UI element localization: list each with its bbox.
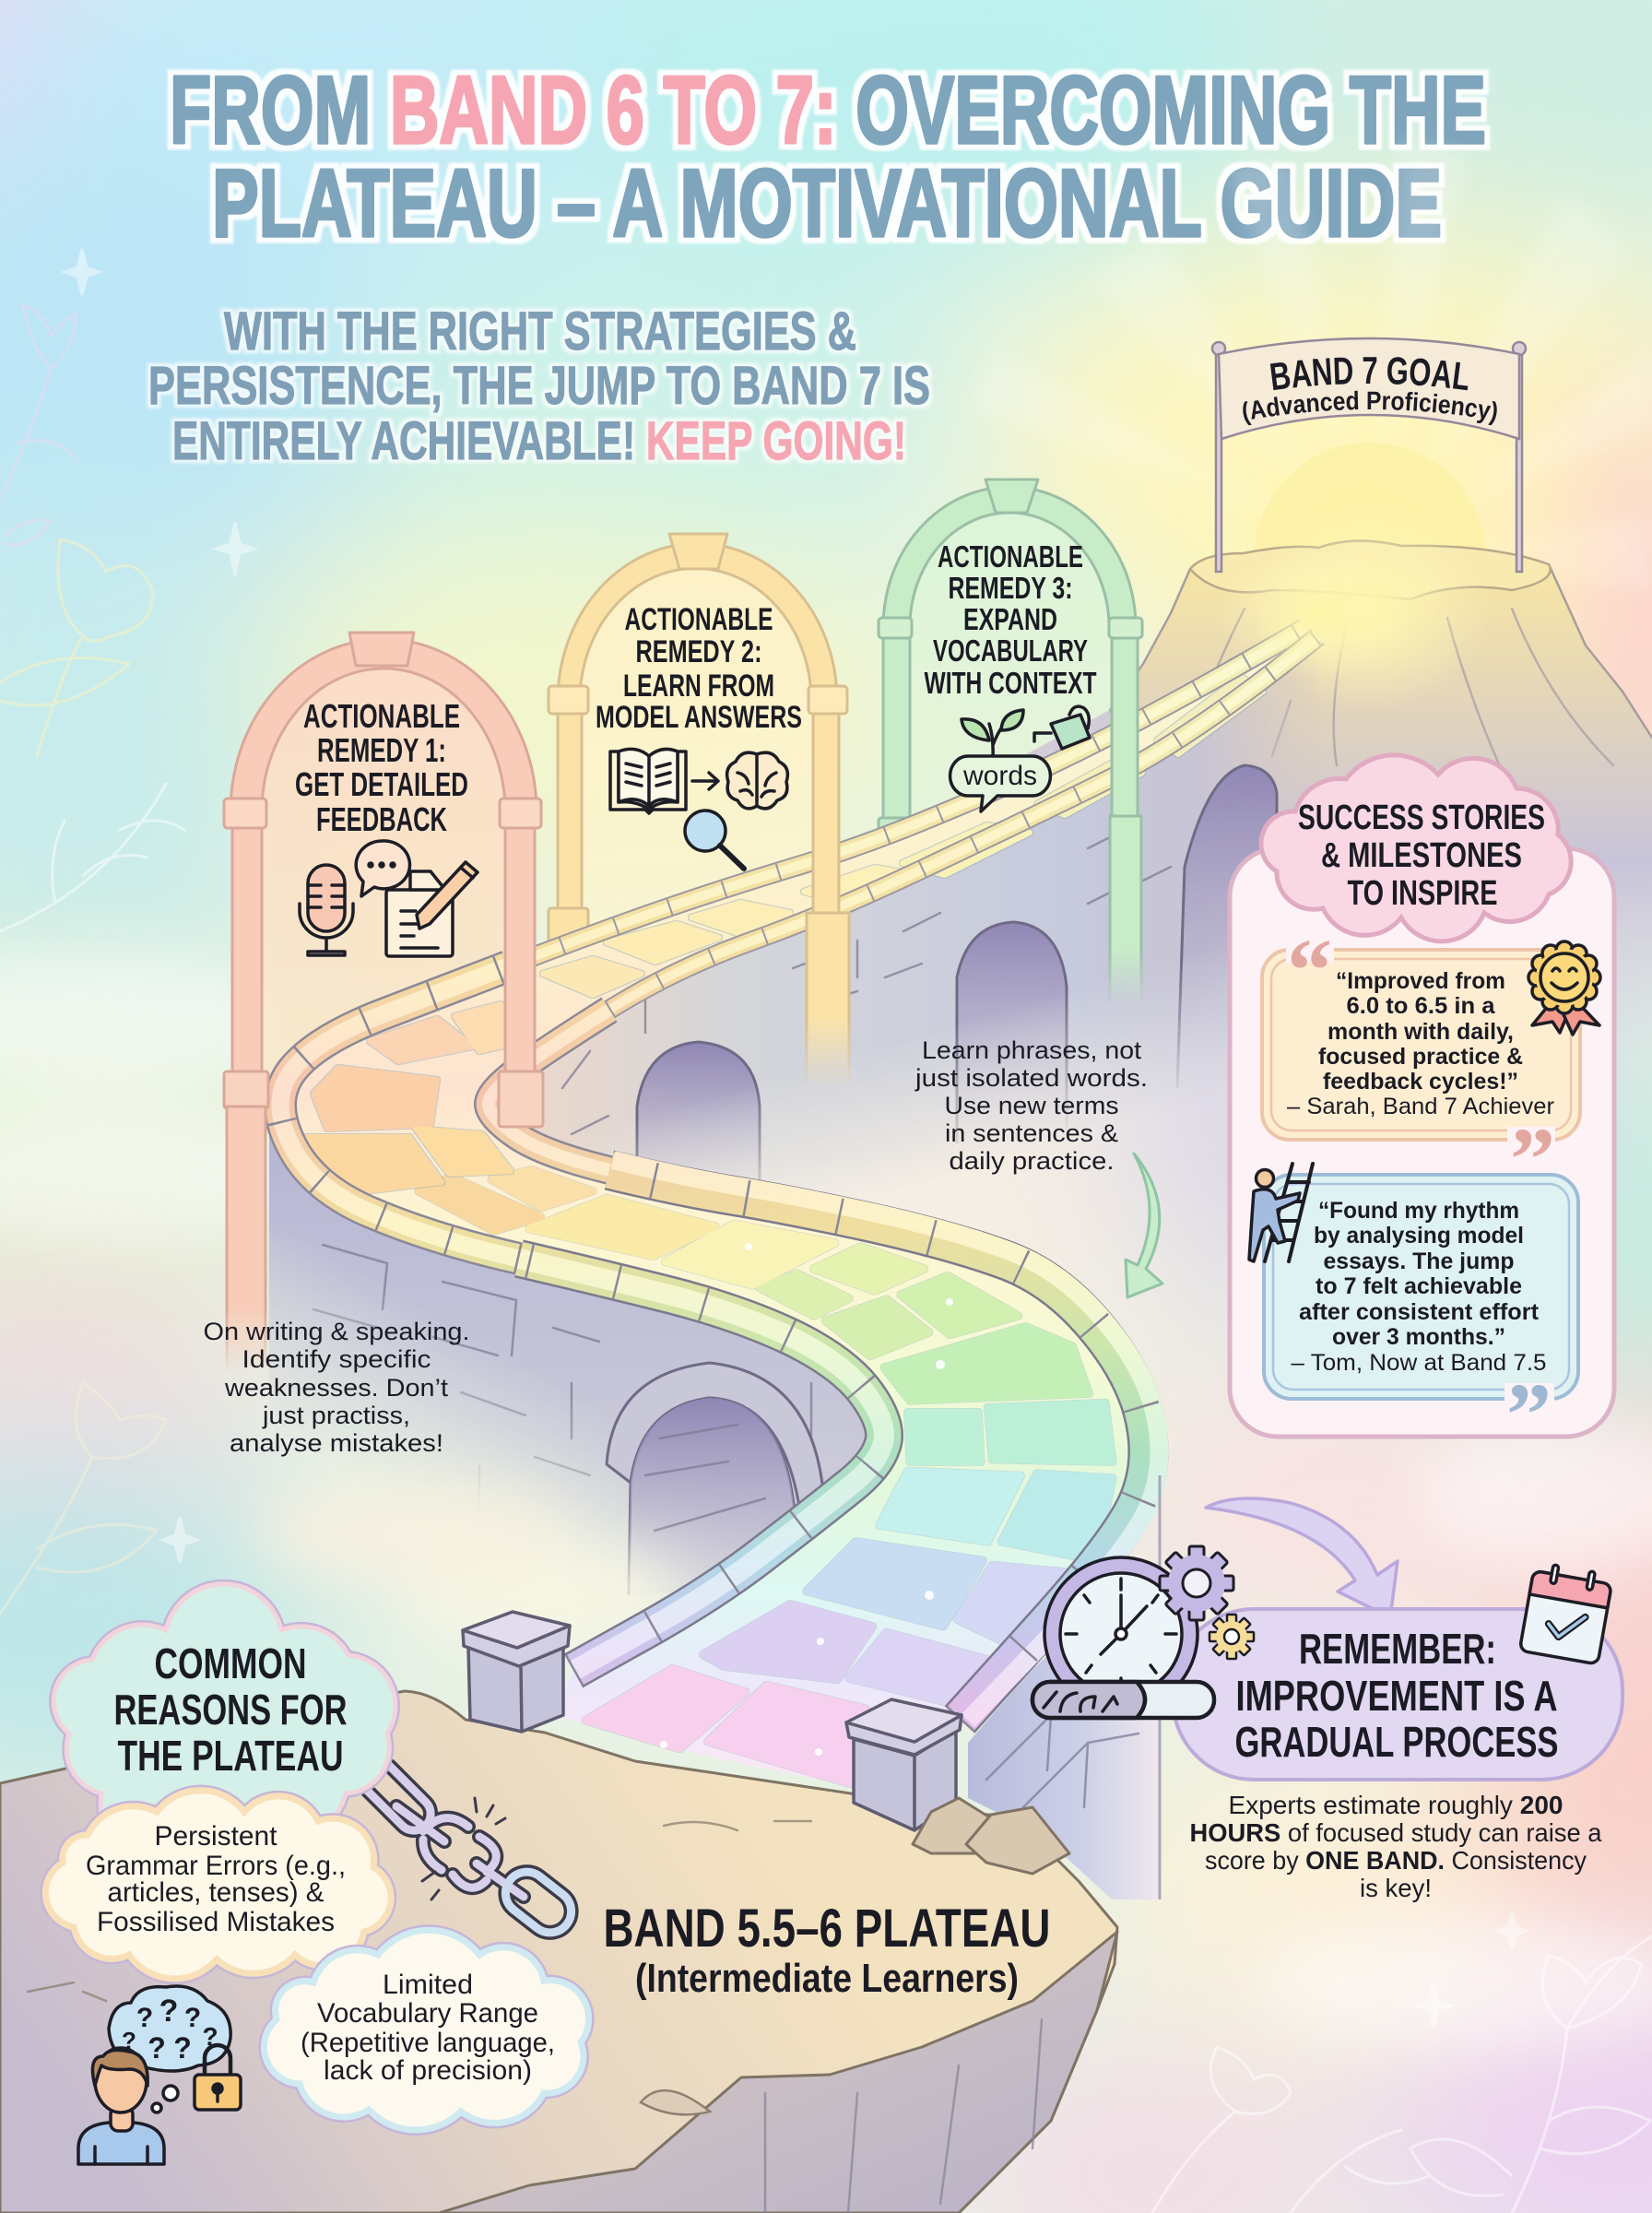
icon: confused learner with thought bubble and lock: ?: [148, 2031, 166, 2065]
wall tunnel 3: [1177, 765, 1277, 1088]
testimonial: Sarah: feedback cycles!”: [1323, 1069, 1518, 1095]
subtitle: motivational message: ENTIRELY ACHIEVABLE! KEEP GOING!: [172, 411, 906, 471]
words label: words: [962, 761, 1037, 791]
cloud: grammar errors: Fossilised Mistakes: [97, 1907, 335, 1937]
subtitle: motivational message: PERSISTENCE, THE JUMP TO BAND 7 IS: [148, 356, 930, 416]
plateau ground: [0, 1691, 1117, 2213]
cliff face: [439, 1932, 1117, 2213]
testimonial: Tom: after consistent effort: [1299, 1299, 1540, 1325]
cloud: common reasons heading: COMMON: [155, 1639, 306, 1687]
remedy 3 text: EXPAND: [963, 602, 1057, 636]
icon: smiling medal: [1528, 941, 1600, 1035]
goal banner: (Advanced Proficiency): [1243, 391, 1497, 426]
banner poles: [1212, 342, 1526, 572]
plateau label: [603, 1899, 1051, 2001]
panel: success stories: [1230, 755, 1614, 1465]
right parapet: [489, 636, 1318, 1721]
gears: [1160, 1546, 1233, 1620]
cloud: limited vocabulary: lack of precision): [324, 2055, 532, 2086]
testimonial: Sarah: focused practice &: [1318, 1044, 1523, 1070]
arch columns in front: [224, 618, 1142, 1374]
success header cloud: [1261, 755, 1571, 941]
arch 3 right column: [1109, 618, 1142, 1005]
sparkles on pavers: [660, 1243, 953, 1756]
remedy 1 text: GET DETAILED: [295, 765, 468, 803]
plateau label: (Intermediate Learners): [635, 1956, 1019, 2001]
upper pavers: [299, 677, 1263, 1192]
note: feedback advice: analyse mistakes!: [230, 1429, 443, 1457]
testimonial: Sarah: “: [1287, 921, 1332, 1021]
remedy 3 text: WITH CONTEXT: [924, 666, 1097, 700]
remedy 2 text: REMEDY 2:: [636, 634, 761, 669]
cloud: grammar errors: Persistent: [155, 1821, 277, 1852]
testimonial: Tom: essays. The jump: [1324, 1249, 1514, 1274]
icon: broken chain: [355, 1755, 580, 1941]
subtitle: motivational message: [148, 302, 930, 471]
note: feedback advice: [203, 1318, 470, 1457]
remedy 1 text: FEEDBACK: [316, 800, 447, 838]
right pillar: [846, 1699, 962, 1830]
plateau label: BAND 5.5–6 PLATEAU: [603, 1899, 1051, 1959]
cloud: grammar errors: [45, 1791, 391, 1979]
parapet stone joints: [519, 1259, 884, 1671]
note: 200 hours: score by ONE BAND. Consistency: [1205, 1846, 1587, 1875]
sun and rays: [968, 138, 1652, 839]
icon: clock with gears and progress bar: [1032, 1546, 1254, 1718]
bridge archway: [607, 1363, 823, 1595]
remedy 3 text: ACTIONABLE: [938, 539, 1083, 574]
cloud: limited vocabulary: Vocabulary Range: [317, 1998, 538, 2029]
cloud: limited vocabulary: (Repetitive language,: [301, 2028, 555, 2058]
left pillar: [463, 1612, 570, 1732]
success header cloud: & MILESTONES: [1321, 836, 1522, 875]
mist clouds below bridge: [258, 1208, 940, 1646]
note: feedback advice: Identify specific: [242, 1345, 431, 1373]
remedy 2 text: [596, 602, 802, 735]
icon: confused learner with thought bubble and lock: [78, 1986, 241, 2164]
remedy 2 text: LEARN FROM: [623, 669, 774, 704]
remedy 3 text: VOCABULARY: [933, 633, 1088, 668]
icon: person climbing ladder: [1249, 1164, 1313, 1261]
cloud: limited vocabulary: Limited: [383, 1970, 473, 2000]
icon: confused learner with thought bubble and lock: ?: [184, 2003, 201, 2033]
note: vocabulary advice: just isolated words.: [914, 1064, 1148, 1092]
note: vocabulary advice: Learn phrases, not: [922, 1036, 1142, 1064]
arrow: green curved: [1126, 1154, 1162, 1297]
icon: open book, brain and magnifier: [610, 749, 787, 869]
parapet stone joints: [609, 1170, 1148, 1720]
icon: microphone, speech bubble and document with pen: [300, 841, 478, 956]
cloud: common reasons heading: REASONS FOR: [114, 1686, 347, 1734]
remedy 1 text: REMEDY 1:: [317, 731, 446, 769]
left parapet: [280, 628, 1304, 1671]
icon: confused learner with thought bubble and lock: ?: [136, 2003, 153, 2033]
banner cloth: [1219, 338, 1519, 439]
note: feedback advice: weaknesses. Don’t: [224, 1374, 449, 1402]
arch 2 back: [549, 534, 837, 1014]
note: feedback advice: just practiss,: [262, 1402, 410, 1429]
lower pavers: [419, 1170, 1113, 1784]
testimonial: Sarah: “Improved from: [1336, 968, 1505, 994]
wall tunnel 1: [636, 1040, 761, 1180]
icon: confused learner with thought bubble and lock: ?: [122, 2027, 136, 2054]
testimonial: Sarah: month with daily,: [1328, 1019, 1514, 1045]
panel: remember callout: REMEMBER:: [1299, 1625, 1496, 1673]
testimonial: Tom: by analysing model: [1314, 1223, 1524, 1249]
arrow: purple curved: [1206, 1498, 1398, 1617]
cloud: grammar errors: Grammar Errors (e.g.,: [86, 1851, 346, 1881]
testimonial: Tom: over 3 months.”: [1332, 1324, 1505, 1350]
arch 2 right column: [807, 686, 849, 1088]
remedy 2 text: MODEL ANSWERS: [596, 700, 802, 735]
boulders: [913, 1798, 1069, 1874]
remedy 3 text: [924, 539, 1097, 700]
subtitle: motivational message: WITH THE RIGHT STRATEGIES &: [224, 302, 856, 361]
arch 1 columns: [224, 799, 543, 1374]
panel: remember callout: IMPROVEMENT IS A: [1235, 1672, 1558, 1720]
icon: sprout, watering can and words bubble: [950, 706, 1090, 811]
note: 200 hours: [1189, 1791, 1602, 1902]
cloud: common reasons heading: [53, 1584, 395, 1869]
panel: remember callout: [1173, 1609, 1622, 1780]
mountain with Band 7 summit: [1032, 507, 1652, 1060]
success header cloud: TO INSPIRE: [1348, 874, 1497, 913]
title: [170, 57, 1486, 257]
testimonial: Sarah: [1262, 921, 1600, 1210]
icon: calendar with check: [1519, 1561, 1613, 1664]
lower right stone wall: [968, 1475, 1160, 1899]
goal banner: [1211, 337, 1527, 574]
testimonial: Tom: [1249, 1164, 1578, 1465]
note: 200 hours: is key!: [1360, 1874, 1432, 1902]
colorful stone road: [280, 628, 1318, 1793]
testimonial: Sarah: 6.0 to 6.5 in a: [1346, 993, 1496, 1019]
testimonial: Tom: – Tom, Now at Band 7.5: [1291, 1350, 1547, 1376]
testimonial: Tom: to 7 felt achievable: [1316, 1273, 1522, 1299]
testimonial: Tom: ”: [1506, 1366, 1552, 1465]
icon: confused learner with thought bubble and lock: ?: [159, 1994, 178, 2029]
cloud: common reasons heading: THE PLATEAU: [118, 1732, 343, 1780]
note: feedback advice: On writing & speaking.: [203, 1318, 470, 1345]
remedy 2 text: ACTIONABLE: [625, 602, 773, 637]
cloud: grammar errors: articles, tenses) &: [107, 1877, 324, 1908]
banner text: BAND 7 GOAL: [1270, 357, 1468, 391]
remedy 1 text: [295, 697, 468, 838]
testimonial: Tom: “Found my rhythm: [1318, 1198, 1519, 1224]
cloud: limited vocabulary: [264, 1930, 589, 2130]
wall tunnel 2: [957, 922, 1067, 1143]
note: 200 hours: HOURS of focused study can raise a: [1189, 1818, 1602, 1847]
success header cloud: SUCCESS STORIES: [1298, 799, 1545, 837]
arch 1 back: [230, 633, 537, 1134]
note: vocabulary advice: Use new terms: [944, 1092, 1119, 1119]
note: 200 hours: Experts estimate roughly 200: [1228, 1791, 1564, 1819]
testimonial: Sarah: ”: [1510, 1110, 1555, 1210]
remedy 1 text: ACTIONABLE: [303, 697, 460, 735]
note: vocabulary advice: [914, 1036, 1148, 1175]
bridge pillars: [463, 1612, 962, 1830]
front bridge wall: [269, 1136, 865, 1580]
note: vocabulary advice: in sentences &: [945, 1119, 1118, 1147]
small rock: [641, 2090, 710, 2114]
summit glow over road end: [1217, 549, 1420, 678]
note: vocabulary advice: daily practice.: [950, 1147, 1114, 1175]
back bridge wall with arches: [533, 673, 1292, 1184]
icon: confused learner with thought bubble and lock: ?: [202, 2022, 218, 2051]
arch 3 back: [879, 479, 1136, 922]
remedy 3 text: REMEDY 3:: [948, 571, 1073, 605]
icon: confused learner with thought bubble and lock: ?: [173, 2031, 192, 2065]
testimonial: Sarah: – Sarah, Band 7 Achiever: [1287, 1094, 1554, 1119]
